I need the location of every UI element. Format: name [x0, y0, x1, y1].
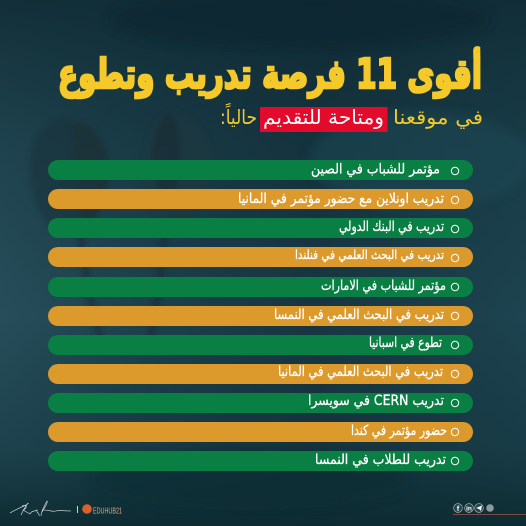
social icons	[454, 504, 494, 513]
item 9	[48, 393, 473, 413]
list of opportunities	[48, 160, 473, 471]
item 2: تدريب اونلاين مع حضور مؤتمر في المانيا	[238, 191, 444, 207]
footer line	[453, 514, 526, 515]
icon: linkedin: in	[466, 506, 472, 512]
item 5: مؤتمر للشباب في الامارات	[321, 278, 446, 294]
item 11: تدريب للطلاب في النمسا	[315, 452, 446, 468]
item 3: تدريب في البنك الدولي	[339, 219, 444, 235]
item 4	[48, 247, 473, 267]
subtitle highlight	[260, 107, 388, 132]
item 3	[48, 218, 473, 238]
icon: telegram	[475, 504, 483, 512]
icon: facebook: f	[457, 504, 460, 513]
subtitle part: currently: حالياً:	[220, 103, 257, 129]
item 2	[48, 189, 473, 209]
logo: EDUHUB21	[82, 504, 122, 516]
item 7	[48, 335, 473, 355]
item 6	[48, 306, 473, 326]
subtitle part: on our site: في موقعنا	[393, 105, 483, 130]
background flowers	[29, 110, 212, 350]
item 8	[48, 364, 473, 384]
item 9: تدريب CERN في سويسرا	[308, 393, 444, 409]
item 5	[48, 277, 473, 297]
subtitle part: available to apply: ومتاحة للتقديم	[263, 105, 384, 129]
item 6: تدريب في البحث العلمي في النمسا	[274, 307, 444, 323]
icon: globe	[486, 504, 494, 512]
title: أقوى 11 فرصة تدريب وتطوع	[58, 47, 482, 99]
item 1: مؤتمر للشباب في الصين	[311, 162, 440, 178]
item 4: تدريب في البحث العلمي في فنلندا	[295, 247, 444, 263]
subtitle	[220, 103, 483, 132]
item 10: حضور مؤتمر في كندا	[351, 423, 447, 439]
item 7: تطوع في اسبانيا	[369, 335, 442, 351]
divider: signature and logo	[77, 506, 78, 513]
item 1	[48, 160, 473, 180]
item 10	[48, 422, 473, 442]
logo wordmark: EDUHUB21	[93, 506, 122, 516]
item 8: تدريب في البحث العلمي في المانيا	[278, 364, 443, 380]
signature	[10, 501, 71, 516]
item 11	[48, 451, 473, 471]
logo mark	[82, 504, 92, 514]
